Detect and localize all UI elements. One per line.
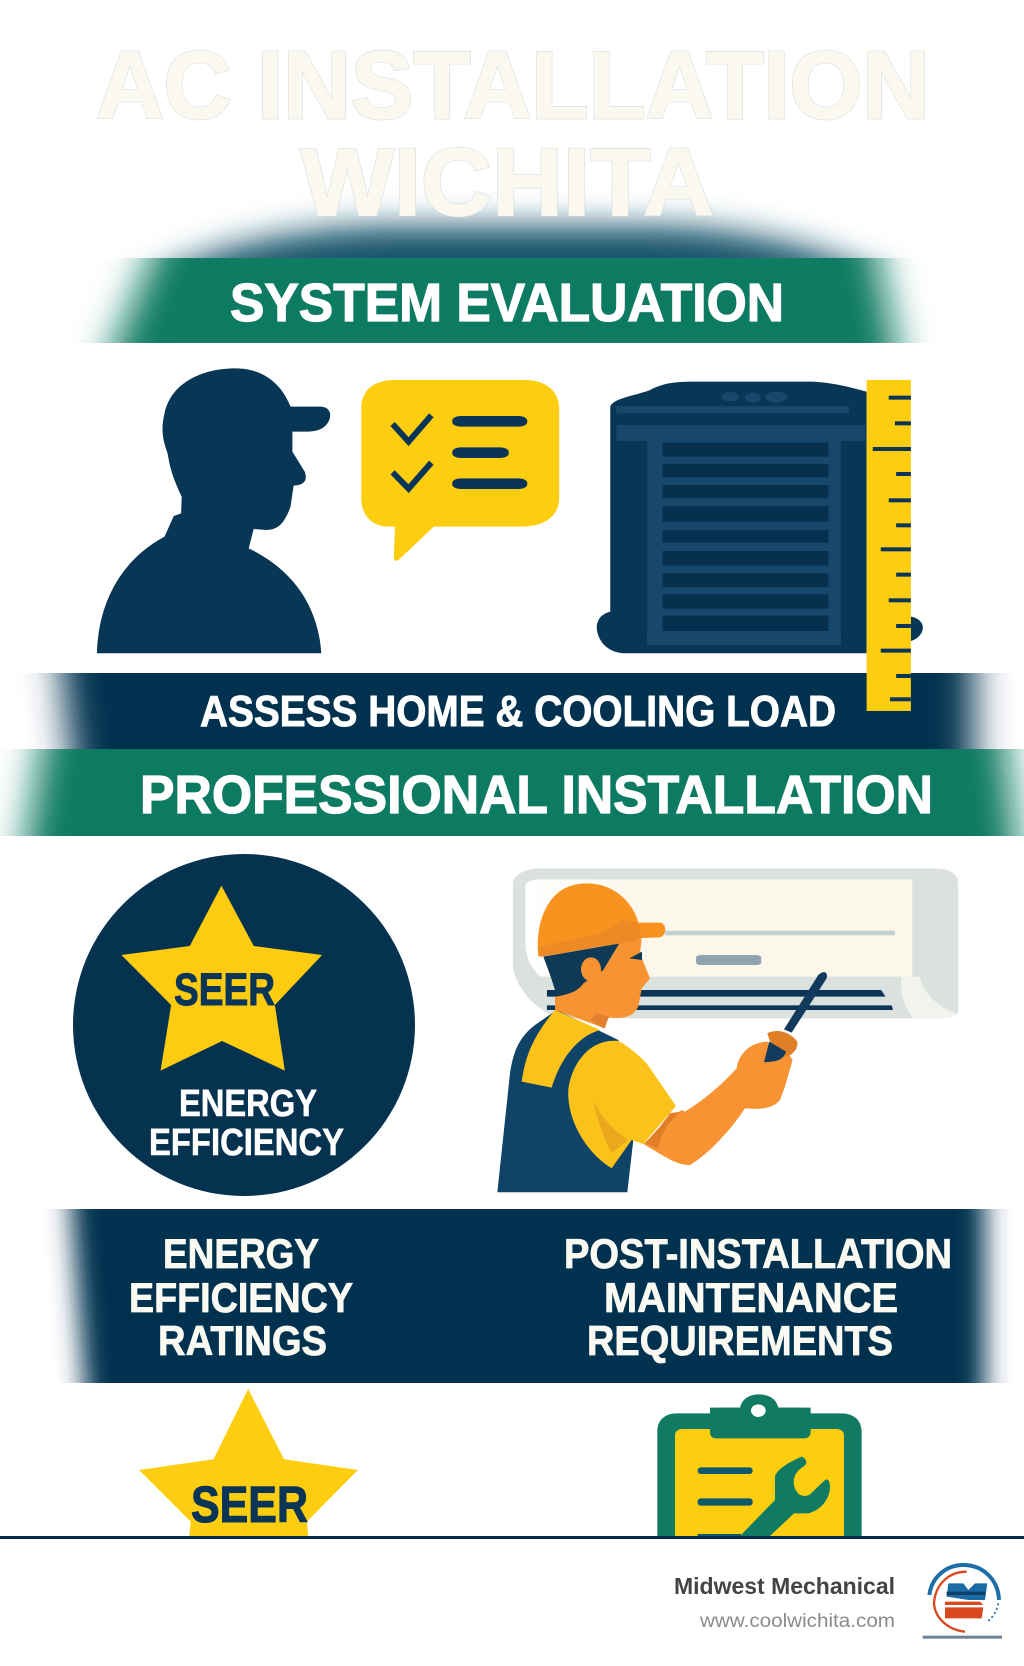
- panel: assess home and cooling load band: ASSESS HOME & COOLING LOAD: [200, 687, 836, 736]
- icon: SEER star: [139, 1389, 358, 1536]
- text: energy efficiency ratings: ENERGY: [163, 1230, 319, 1277]
- badge: SEER energy efficiency circle: [73, 854, 415, 1196]
- icon: checklist speech bubble: [361, 380, 559, 561]
- illustration: indoor wall AC unit: [513, 868, 958, 1018]
- badge: SEER energy efficiency circle: EFFICIENCY: [149, 1122, 344, 1164]
- footer: company name and website: [674, 1573, 895, 1632]
- title: WICHITA: [301, 129, 714, 236]
- badge: SEER energy efficiency circle: SEER: [174, 964, 275, 1015]
- text: energy efficiency ratings: [129, 1230, 353, 1364]
- panel: professional installation heading: [0, 749, 1024, 836]
- text: energy efficiency ratings: RATINGS: [158, 1317, 327, 1364]
- title: AC INSTALLATION: [96, 32, 930, 139]
- panel: assess home and cooling load band: [29, 673, 1006, 749]
- badge: SEER energy efficiency circle: ENERGY: [179, 1083, 317, 1125]
- panel: system evaluation heading: [81, 258, 928, 343]
- icon: clipboard with wrench: [657, 1394, 862, 1537]
- icon: yellow measuring ruler: [867, 380, 911, 711]
- icon: SEER star: SEER: [191, 1476, 308, 1533]
- title: WICHITA: [301, 129, 714, 236]
- panel: professional installation heading: PROFESSIONAL INSTALLATION: [140, 765, 933, 825]
- icon: yellow star: [121, 886, 322, 1071]
- icon: outdoor AC unit: [597, 382, 923, 653]
- text: post-installation maintenance requirements: [564, 1230, 952, 1364]
- footer divider line: [0, 1536, 1024, 1539]
- icon: technician silhouette: [97, 368, 330, 653]
- banner shadow above system evaluation: [135, 226, 905, 290]
- panel: ratings and maintenance band: [49, 1209, 1008, 1383]
- panel: system evaluation heading: SYSTEM EVALUATION: [230, 273, 784, 333]
- text: post-installation maintenance requirements: REQUIREMENTS: [587, 1317, 893, 1364]
- illustration: technician with screwdriver: [497, 883, 827, 1192]
- title: AC INSTALLATION: [96, 32, 930, 139]
- text: post-installation maintenance requirements: POST-INSTALLATION: [564, 1230, 952, 1277]
- text: energy efficiency ratings: EFFICIENCY: [129, 1274, 353, 1321]
- footer: company name and website: Midwest Mechanical: [674, 1573, 895, 1599]
- footer: company name and website: www.coolwichita.com: [699, 1611, 895, 1632]
- logo: Midwest Mechanical: [923, 1565, 1002, 1639]
- text: post-installation maintenance requirements: MAINTENANCE: [604, 1274, 898, 1321]
- title: [96, 32, 930, 236]
